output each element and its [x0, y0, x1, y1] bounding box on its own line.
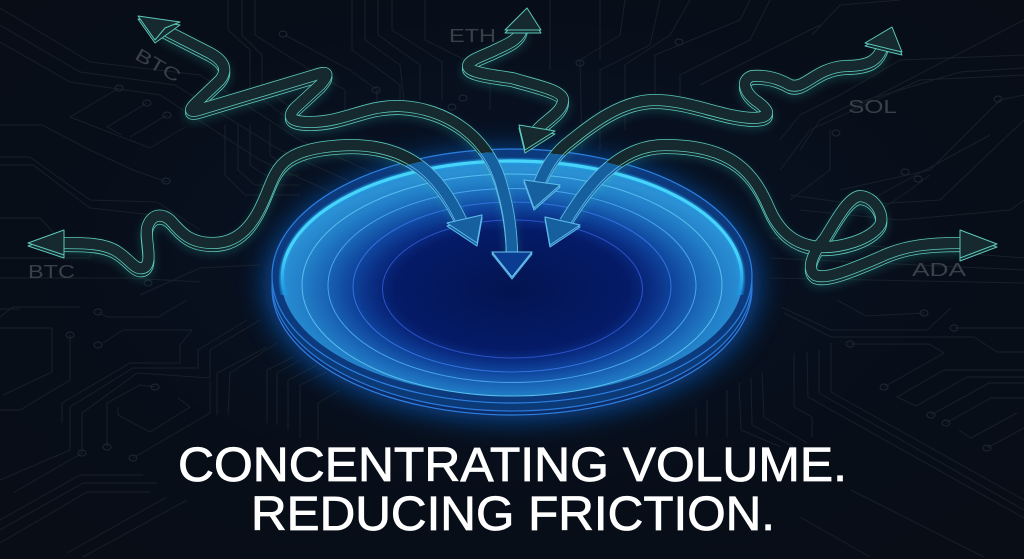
- arrow: BTC top, flowing to centre: [138, 16, 532, 279]
- title: [178, 439, 847, 541]
- arrow tips tinted blue inside disc: [404, 152, 624, 280]
- arrow: BTC left, flowing to centre: [28, 145, 482, 271]
- concentric rings: [302, 174, 722, 396]
- bright rim highlight: [278, 157, 746, 295]
- liquidity pool disc: [264, 149, 760, 421]
- disc glow: [264, 149, 760, 421]
- label: ETH: ETH: [449, 26, 496, 46]
- arrow: SOL, flowing to centre: [524, 27, 902, 210]
- label: BTC top: BTC: [132, 44, 184, 86]
- label: ADA: ADA: [912, 260, 966, 280]
- centre arrowhead over dark core: [492, 252, 532, 277]
- arrow: ADA, flowing to centre: [545, 145, 997, 279]
- disc rim base: [272, 161, 752, 415]
- title: REDUCING FRICTION.: [251, 488, 775, 541]
- arrow: ETH, flowing to centre: [468, 8, 563, 153]
- labels: token names: [28, 26, 966, 282]
- title: CONCENTRATING VOLUME.: [178, 439, 847, 492]
- glow under arrows: [62, 33, 962, 281]
- label: BTC left: BTC: [28, 262, 75, 282]
- disc surface: [281, 160, 743, 396]
- label: SOL: SOL: [848, 97, 897, 117]
